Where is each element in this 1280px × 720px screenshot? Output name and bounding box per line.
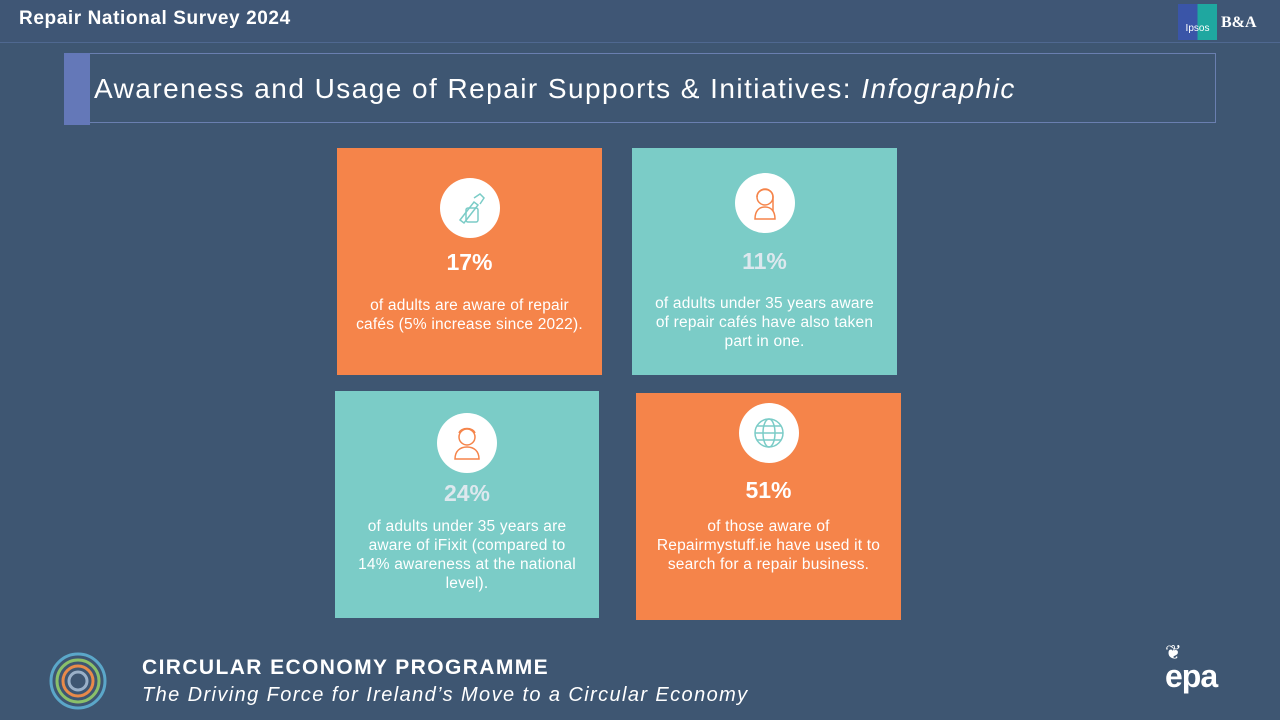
logo: Ipsos B&A: B&A <box>1221 14 1257 31</box>
stat: 24%: 24% <box>444 480 490 506</box>
text: of adults under 35 years are aware of iFixit (compared to 14% awareness at the national level). <box>358 518 576 592</box>
title box: Awareness and Usage of Repair Supports & Initiatives: Infographic <box>94 73 1016 104</box>
footer heading: CIRCULAR ECONOMY PROGRAMME <box>142 656 549 679</box>
stat: 17%: 17% <box>446 249 493 275</box>
text: of adults are aware of repair cafés (5% increase since 2022). <box>356 297 583 333</box>
logo: circular economy <box>50 652 106 710</box>
icon: wrench fist <box>440 178 500 238</box>
icon: globe <box>738 403 798 463</box>
header title: Repair National Survey 2024 <box>19 8 291 29</box>
text: of those aware of Repairmystuff.ie have used it to search for a repair business. <box>657 518 880 573</box>
stat: 11%: 11% <box>742 248 787 274</box>
panel: Repairmystuff.ie <box>636 393 901 620</box>
icon: young man <box>437 413 497 473</box>
title box <box>64 53 1216 123</box>
stat: 51%: 51% <box>745 477 792 503</box>
logo: Ipsos B&A: Ipsos <box>1186 23 1209 34</box>
footer subtitle: The Driving Force for Ireland’s Move to a Circular Economy <box>142 684 749 706</box>
header band <box>0 0 1280 43</box>
logo: epa <box>1165 642 1218 694</box>
logo: epa: ❦ <box>1165 642 1182 664</box>
panel: under 35 taken part <box>632 148 897 375</box>
icon: woman <box>734 173 794 233</box>
text: of adults under 35 years aware of repair cafés have also taken part in one. <box>655 295 874 350</box>
panel: iFixit awareness <box>335 391 599 618</box>
logo: epa: epa <box>1165 658 1217 694</box>
logo: Ipsos B&A <box>1178 4 1257 40</box>
panel: repair cafe awareness <box>337 148 602 375</box>
